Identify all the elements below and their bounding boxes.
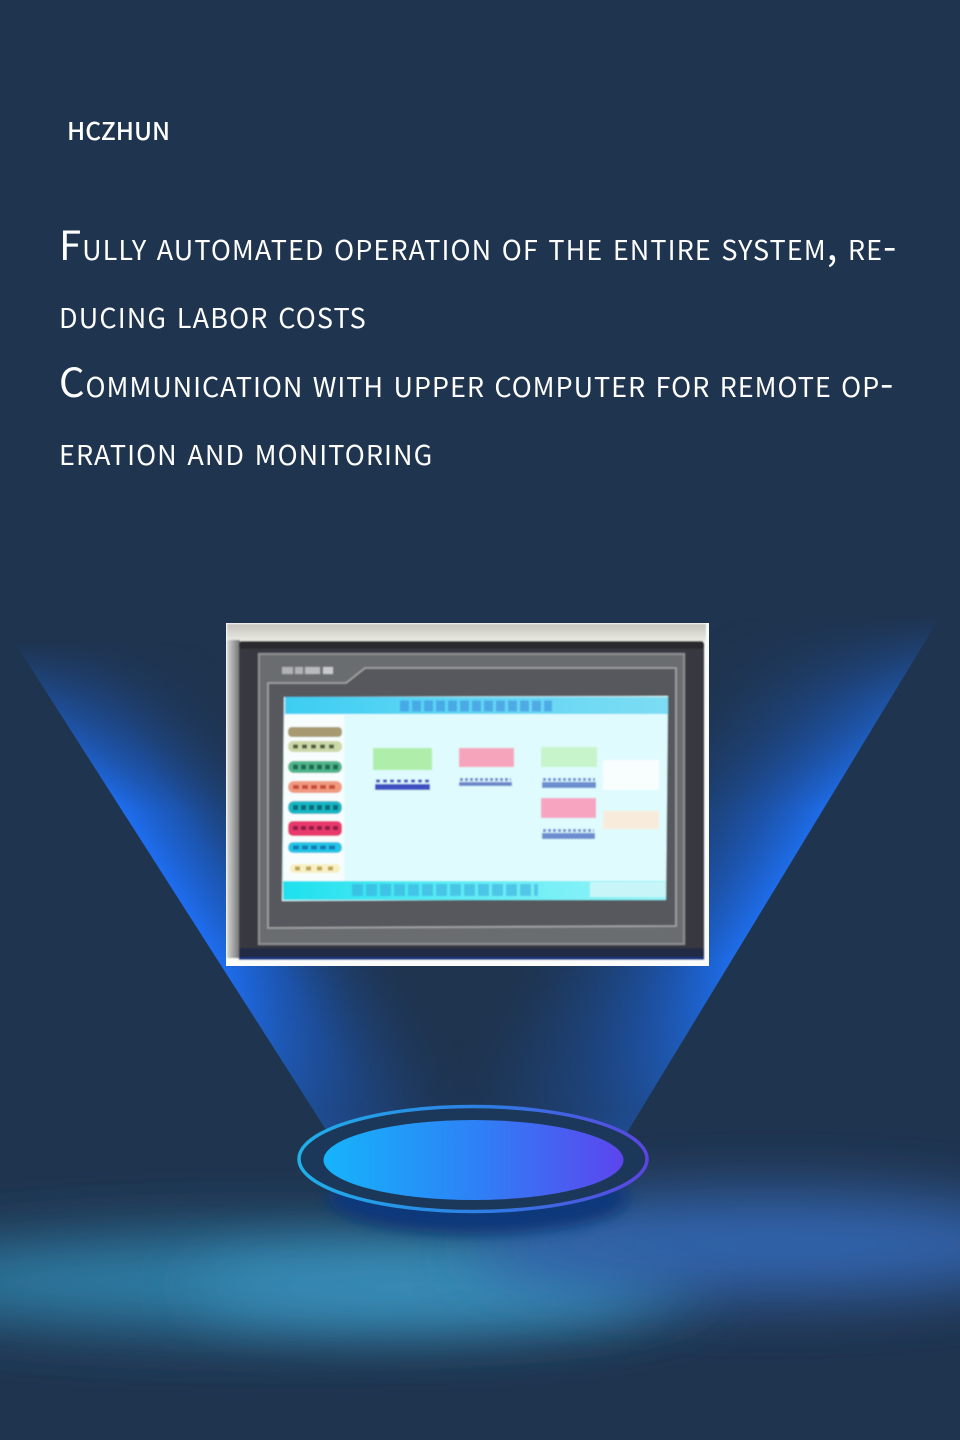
touch screen HMI photo [226, 623, 709, 966]
heading text block: Communication with upper computer for remote op- [59, 351, 894, 409]
heading text block: eration and monitoring [59, 421, 433, 476]
right light beam [486, 624, 935, 1132]
heading text block [59, 214, 897, 476]
screen [282, 696, 668, 901]
status blocks [373, 747, 659, 839]
left light beam [19, 648, 444, 1130]
ground glow [0, 1193, 960, 1330]
platform shadow [328, 1162, 628, 1234]
platform ring [299, 1106, 647, 1212]
brand name: HCZHUN [67, 112, 170, 148]
platform disc [324, 1120, 624, 1200]
device casing [227, 624, 706, 960]
background scene: light beams, platform and ground glow [0, 624, 960, 1372]
brand label on bezel [282, 667, 333, 674]
side menu buttons [288, 727, 342, 873]
heading text block: Fully automated operation of the entire system, re- [59, 214, 897, 272]
heading text block: ducing labor costs [59, 284, 367, 339]
